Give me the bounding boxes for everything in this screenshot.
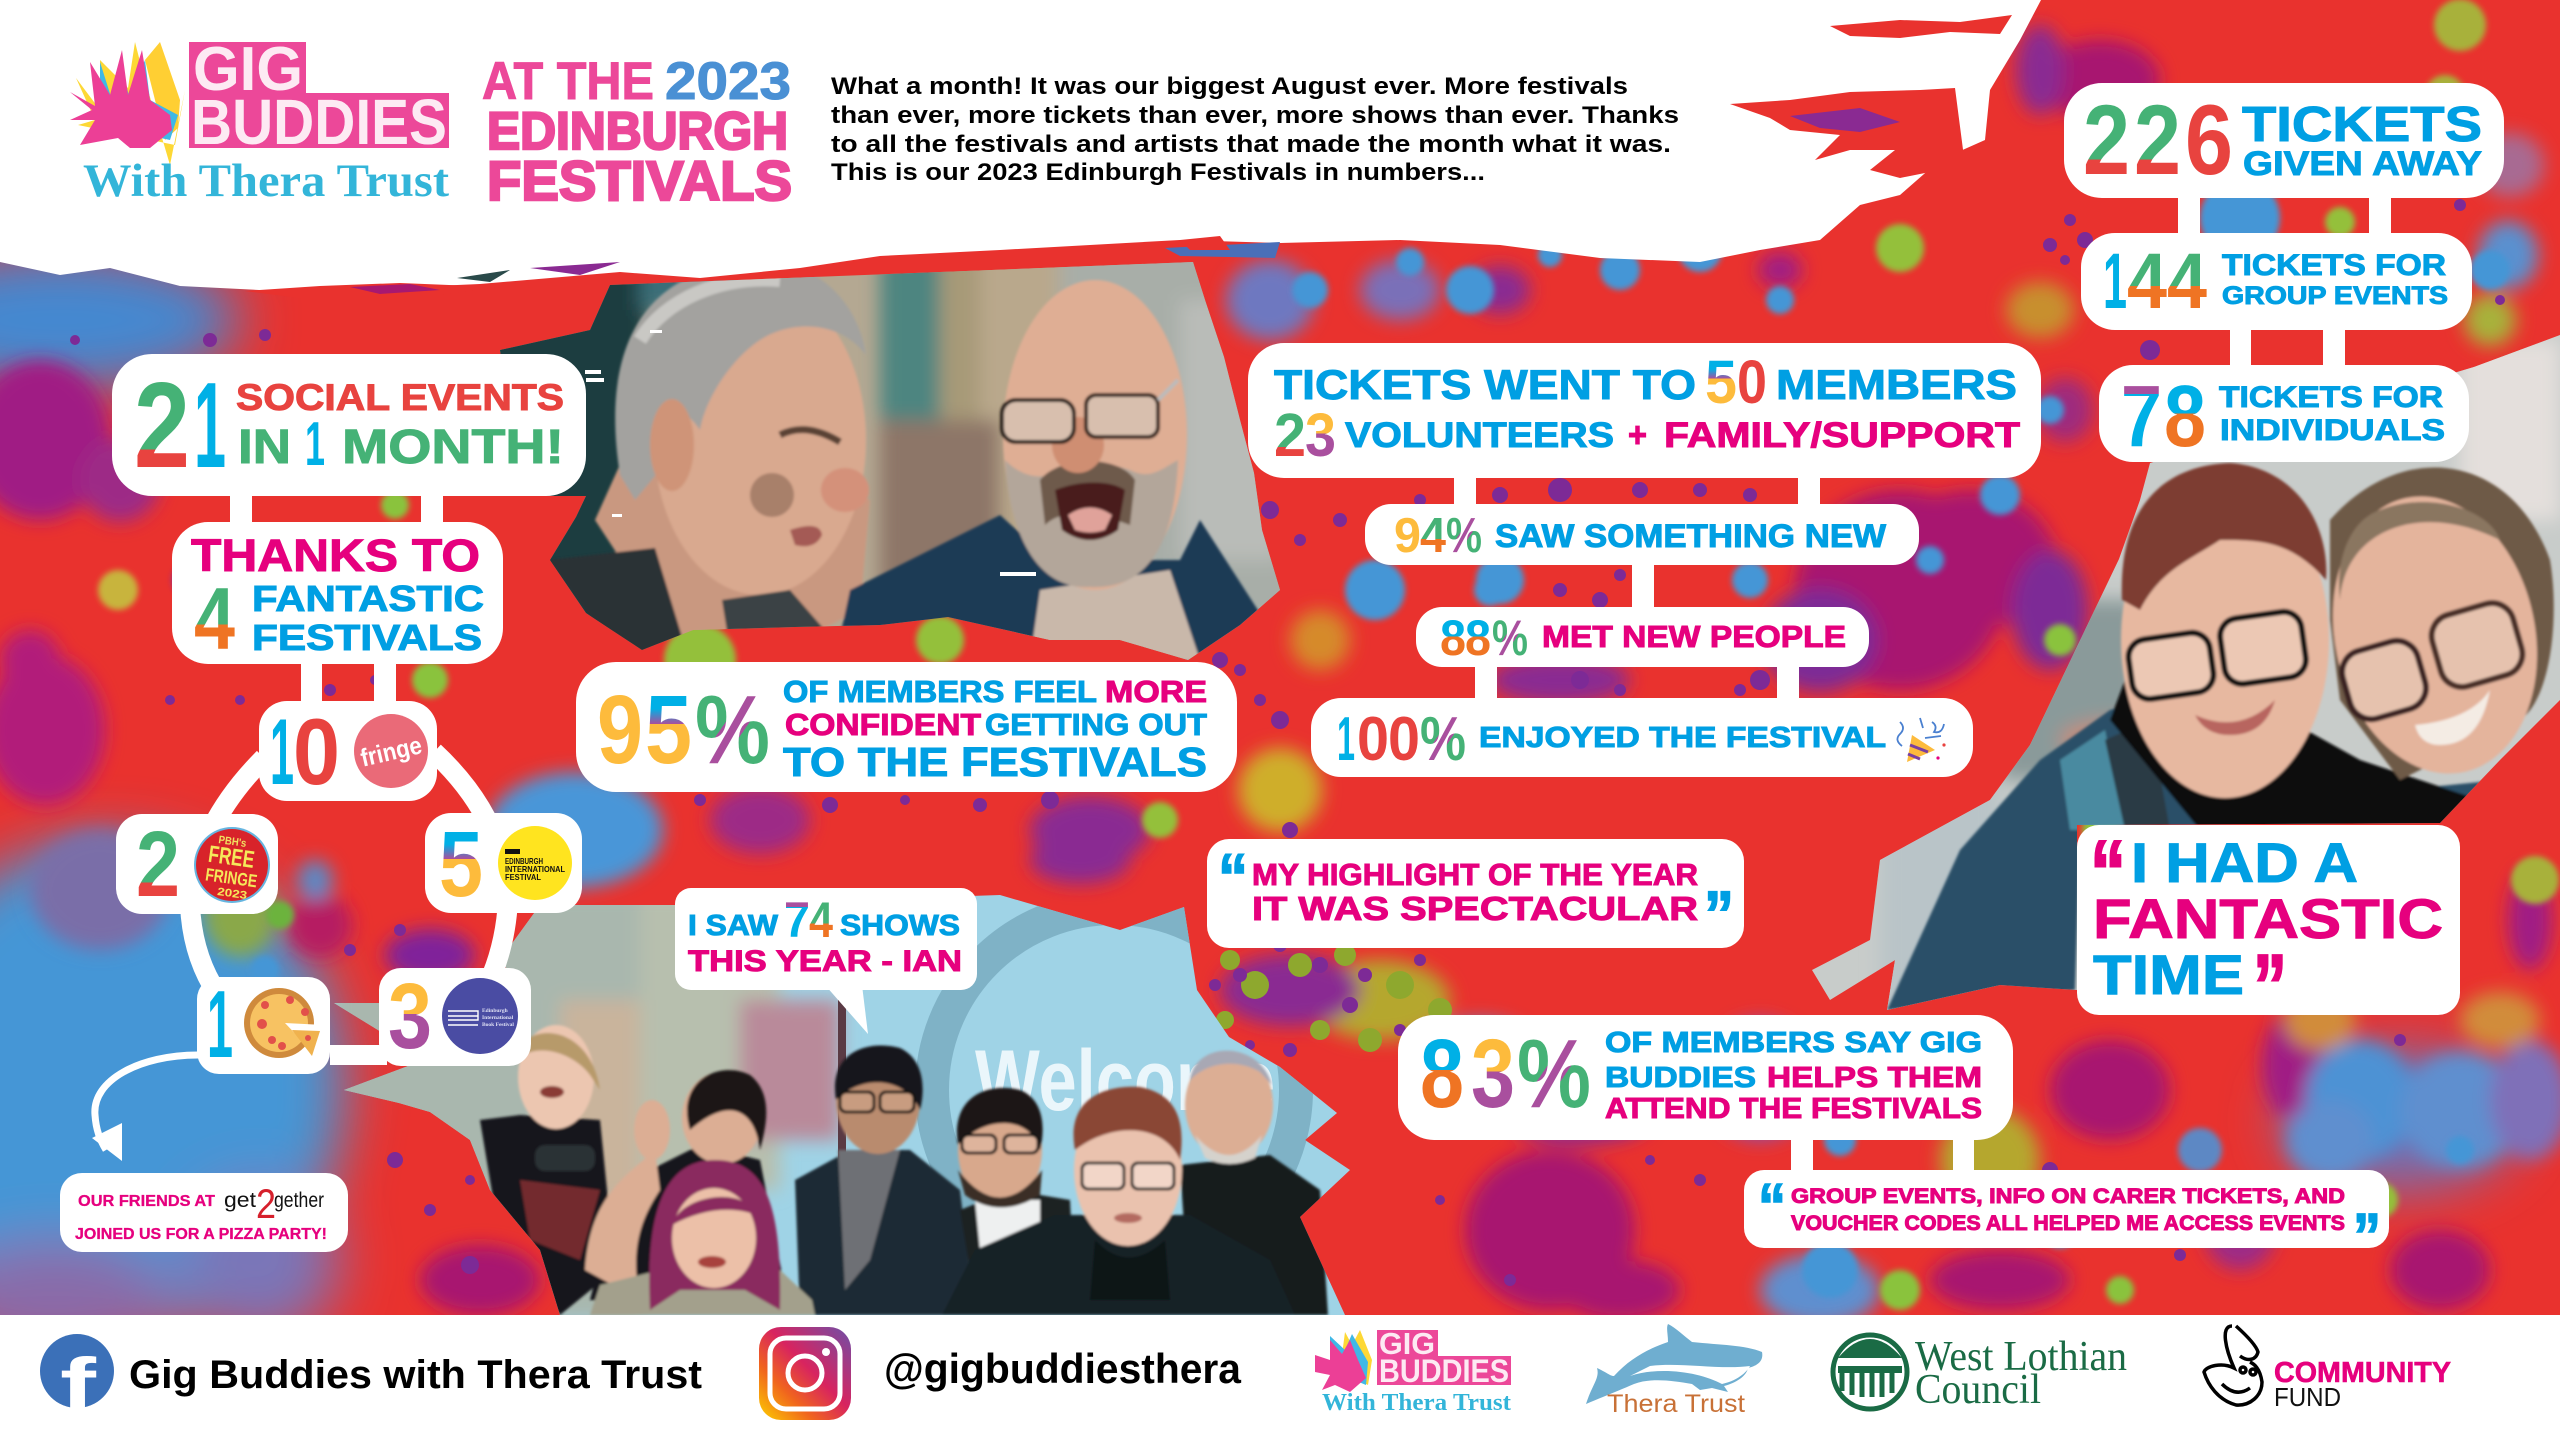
footer logo: Community Fund xyxy=(2204,1326,2451,1412)
card: 83% say Gig Buddies helps them attend: HELPS THEM xyxy=(1767,1062,1982,1094)
card: thanks to 4 fantastic festivals: FANTASTIC xyxy=(252,578,484,619)
card: 83% say Gig Buddies helps them attend: BUDDIES xyxy=(1605,1062,1756,1094)
logo: Gig Buddies with Thera Trust: GIG xyxy=(193,35,303,104)
card: 10 fringe: 1 xyxy=(270,699,294,804)
person 3 front woman xyxy=(590,1270,815,1315)
card: 226 tickets given away: 2 xyxy=(2083,84,2130,195)
card: 100% enjoyed the festival: 0 xyxy=(1388,705,1420,774)
card: 226 tickets given away: TICKETS xyxy=(2242,98,2482,152)
card: 94% saw something new: SAW SOMETHING NEW xyxy=(1495,518,1887,554)
card: 100% enjoyed the festival: 1 xyxy=(1337,705,1355,774)
footer logo: Gig Buddies small: GIG xyxy=(1379,1326,1435,1361)
person 6 front boy xyxy=(942,1215,1295,1315)
card: 226 tickets given away: 6 xyxy=(2185,84,2233,195)
card: 95% of members feel more confident: MORE xyxy=(1105,674,1207,709)
card: 21 social events in 1 month: 2 xyxy=(134,357,190,493)
quote card: I had a fantastic time: FANTASTIC xyxy=(2093,887,2443,950)
photo: group of seven members: Welcome xyxy=(975,1033,1275,1129)
card: get2gether pizza party: JOINED US FOR A PIZZA PARTY! xyxy=(75,1226,327,1243)
photo: two men laughing xyxy=(500,262,1280,660)
icon: instagram xyxy=(759,1327,851,1420)
quote card: group events, carer tickets, voucher codes: ” xyxy=(2353,1200,2381,1272)
quote card: group events, carer tickets, voucher codes: “ xyxy=(1758,1170,1786,1242)
footer logo: West Lothian Council xyxy=(1833,1334,2127,1413)
quote card: I had a fantastic time: ” xyxy=(2253,937,2287,1037)
card: 1 pizza party xyxy=(197,971,330,1078)
logo: Gig Buddies with Thera Trust: BUDDIES xyxy=(191,86,447,158)
card: tickets went to 50 members, 23 volunteers: 5 xyxy=(1705,348,1737,416)
card: 83% say Gig Buddies helps them attend: 3 xyxy=(1471,1019,1515,1128)
card: 94% saw something new: % xyxy=(1446,509,1482,563)
card: 10 fringe: 0 xyxy=(293,699,340,804)
card: 88% met new people: MET NEW PEOPLE xyxy=(1542,619,1846,654)
card: 83% say Gig Buddies helps them attend: 8 xyxy=(1420,1019,1464,1128)
card: 95% of members feel more confident: GETTING OUT xyxy=(985,707,1207,742)
card: 21 social events in 1 month: 1 xyxy=(194,357,226,493)
photo: couple smiling xyxy=(1800,320,2560,1040)
card: tickets went to 50 members, 23 volunteers: VOLUNTEERS xyxy=(1345,416,1614,455)
footer logo: Gig Buddies small xyxy=(1315,1326,1511,1416)
card: tickets went to 50 members, 23 volunteers xyxy=(1248,343,2041,478)
card: 21 social events in 1 month: MONTH! xyxy=(342,421,564,474)
heading: At the 2023 Edinburgh Festivals xyxy=(482,52,792,212)
speech bubble: I saw 74 shows: I SAW xyxy=(688,910,779,942)
footer: instagram xyxy=(759,1327,1242,1420)
card: tickets went to 50 members, 23 volunteers: 3 xyxy=(1305,401,1336,469)
footer: facebook: Gig Buddies with Thera Trust xyxy=(129,1353,702,1397)
icon: viaduct emblem xyxy=(1833,1335,1907,1409)
icon: pizza xyxy=(244,988,324,1060)
card: 100% enjoyed the festival: ENJOYED THE FESTIVAL xyxy=(1479,722,1886,754)
icon: crossed fingers hand xyxy=(2204,1326,2262,1405)
logo: Gig Buddies with Thera Trust: With Thera Trust xyxy=(83,155,449,207)
logo: Gig Buddies with Thera Trust xyxy=(70,35,449,207)
card: 100% enjoyed the festival: 0 xyxy=(1357,705,1389,774)
speech bubble: I saw 74 shows: SHOWS xyxy=(840,910,960,942)
card: 83% say Gig Buddies helps them attend xyxy=(1398,1015,2013,1140)
card: 21 social events in 1 month: 1 xyxy=(305,410,325,479)
intro paragraph xyxy=(831,73,1679,186)
card: get2gether pizza party: 2 xyxy=(256,1180,276,1227)
intro paragraph: This is our 2023 Edinburgh Festivals in numbers... xyxy=(831,159,1485,186)
connectors: festivals tree xyxy=(190,490,508,1065)
icon: PBH free fringe logo: FREE xyxy=(207,841,256,874)
icon: EIF logo: INTERNATIONAL xyxy=(505,864,565,874)
card: tickets went to 50 members, 23 volunteers: + xyxy=(1628,416,1647,455)
card: tickets went to 50 members, 23 volunteers: MEMBERS xyxy=(1776,361,2017,408)
card: 21 social events in 1 month: SOCIAL EVENTS xyxy=(236,377,564,418)
speech bubble: I saw 74 shows: 4 xyxy=(809,892,833,948)
speech bubble: I saw 74 shows xyxy=(675,888,977,1034)
heading: At the 2023 Edinburgh Festivals: FESTIVALS xyxy=(487,149,792,212)
icon: PBH free fringe logo: FRINGE xyxy=(204,864,258,891)
heading: At the 2023 Edinburgh Festivals: 2023 xyxy=(665,52,791,111)
card: 21 social events in 1 month xyxy=(112,354,586,496)
card: 78 tickets for individuals: 7 xyxy=(2121,368,2162,465)
card: 78 tickets for individuals: TICKETS FOR xyxy=(2219,381,2443,414)
quote card: my highlight of the year xyxy=(1207,839,1744,951)
card: get2gether pizza party: OUR FRIENDS AT xyxy=(78,1193,216,1210)
card: 95% of members feel more confident: OF MEMBERS FEEL xyxy=(783,674,1097,709)
footer logo: Community Fund: COMMUNITY xyxy=(2274,1357,2451,1389)
card: 95% of members feel more confident xyxy=(576,662,1237,792)
card: 2 PBH free fringe: 2 xyxy=(136,812,180,916)
icon: book festival logo xyxy=(442,978,518,1054)
icon: EIF logo: FESTIVAL xyxy=(505,872,541,882)
card: 88% met new people: % xyxy=(1492,610,1528,666)
footer logo: Thera Trust dolphin: Thera Trust xyxy=(1607,1390,1745,1418)
footer white band xyxy=(0,1315,2560,1440)
person 5 xyxy=(960,1193,1073,1263)
card: 100% enjoyed the festival xyxy=(1311,698,1973,777)
person 7 older man xyxy=(1180,1155,1328,1315)
icon: book festival logo: International xyxy=(482,1015,514,1021)
card: get2gether pizza party: get xyxy=(224,1189,256,1212)
left man xyxy=(594,466,870,635)
card: 88% met new people xyxy=(1416,607,1869,667)
dense splatter band xyxy=(1216,944,1452,1052)
icon: facebook xyxy=(40,1334,114,1426)
quote card: my highlight of the year: IT WAS SPECTACULAR xyxy=(1252,890,1698,927)
footer: facebook xyxy=(40,1334,702,1426)
card: thanks to 4 fantastic festivals: 4 xyxy=(194,569,235,668)
card: 78 tickets for individuals: 8 xyxy=(2164,368,2206,465)
header torn white panel xyxy=(0,0,2041,292)
card: 226 tickets given away xyxy=(2064,83,2504,198)
card: 95% of members feel more confident: 5 xyxy=(645,675,692,784)
right man xyxy=(835,515,1290,660)
quote card: group events, carer tickets, voucher codes xyxy=(1744,1170,2389,1272)
card: 2 PBH free fringe xyxy=(116,812,278,916)
heading: At the 2023 Edinburgh Festivals: EDINBURGH xyxy=(487,102,788,161)
heading: At the 2023 Edinburgh Festivals: AT THE xyxy=(482,52,654,111)
card: 100% enjoyed the festival: % xyxy=(1420,705,1466,774)
icon: PBH free fringe logo: 2023 xyxy=(216,886,248,902)
quote card: I had a fantastic time: I HAD A xyxy=(2131,831,2358,894)
intro paragraph: What a month! It was our biggest August ever. More festivals xyxy=(831,73,1628,100)
footer logo: West Lothian Council: Council xyxy=(1915,1367,2041,1413)
card: 94% saw something new: 9 xyxy=(1394,509,1421,563)
card: get2gether pizza party xyxy=(60,1173,348,1252)
card: 144 tickets for group events: 1 xyxy=(2103,236,2127,325)
card: 10 fringe xyxy=(259,699,437,804)
card: 83% say Gig Buddies helps them attend: OF MEMBERS SAY GIG xyxy=(1605,1027,1982,1059)
card: 144 tickets for group events: 4 xyxy=(2127,236,2167,325)
icon: book festival logo: Edinburgh xyxy=(482,1008,508,1014)
person 1 xyxy=(480,1115,615,1315)
card: 3 Edinburgh International Book Festival xyxy=(379,964,531,1068)
icon: EIF logo: EDINBURGH xyxy=(505,856,543,866)
quote card: my highlight of the year: ” xyxy=(1704,877,1734,951)
card: 226 tickets given away: 2 xyxy=(2134,84,2181,195)
intro paragraph: than ever, more tickets than ever, more shows than ever. Thanks xyxy=(831,102,1679,129)
card: 94% saw something new: 4 xyxy=(1420,509,1446,563)
card: 144 tickets for group events: GROUP EVENTS xyxy=(2222,282,2448,310)
intro paragraph: to all the festivals and artists that made the month what it was. xyxy=(831,131,1671,158)
footer logo: Gig Buddies small: With Thera Trust xyxy=(1322,1390,1511,1416)
quote card: group events, carer tickets, voucher codes: VOUCHER CODES ALL HELPED ME ACCESS EVENTS xyxy=(1791,1212,2345,1235)
person 2 xyxy=(590,1145,790,1315)
photo: group of seven members xyxy=(330,890,1390,1320)
card: 95% of members feel more confident: % xyxy=(695,675,770,784)
card: 83% say Gig Buddies helps them attend: ATTEND THE FESTIVALS xyxy=(1605,1093,1982,1125)
footer logo: West Lothian Council: West Lothian xyxy=(1915,1334,2127,1380)
person 4 glasses jacket xyxy=(795,1150,975,1315)
footer logo: Thera Trust dolphin xyxy=(1586,1324,1762,1418)
footer logo: Gig Buddies small: BUDDIES xyxy=(1379,1353,1509,1389)
card: 144 tickets for group events: TICKETS FOR xyxy=(2222,249,2446,282)
card: 88% met new people: 8 xyxy=(1465,610,1491,666)
quote card: my highlight of the year: “ xyxy=(1218,840,1248,914)
card: thanks to 4 fantastic festivals: FESTIVALS xyxy=(252,617,482,658)
icon: EIF logo xyxy=(498,826,572,900)
icon: spiky hair splash xyxy=(70,42,185,165)
card: tickets went to 50 members, 23 volunteers: FAMILY/SUPPORT xyxy=(1664,416,2020,455)
card: 83% say Gig Buddies helps them attend: % xyxy=(1517,1019,1591,1128)
icon: book festival logo: Book Festival xyxy=(482,1022,514,1028)
card: 1 pizza party: 1 xyxy=(207,971,233,1078)
card: 144 tickets for group events xyxy=(2081,233,2472,330)
quote card: group events, carer tickets, voucher codes: GROUP EVENTS, INFO ON CARER TICKETS, AND xyxy=(1791,1185,2345,1208)
card: 78 tickets for individuals: INDIVIDUALS xyxy=(2220,414,2445,447)
icon: facebook: f xyxy=(60,1343,97,1426)
speech bubble: I saw 74 shows: THIS YEAR - IAN xyxy=(688,945,962,978)
card: 95% of members feel more confident: CONFIDENT xyxy=(785,707,981,742)
quote card: I had a fantastic time: TIME xyxy=(2093,943,2244,1006)
footer logo: Community Fund: FUND xyxy=(2274,1382,2341,1412)
quote card: I had a fantastic time xyxy=(2077,823,2460,1037)
speech bubble: I saw 74 shows: 7 xyxy=(784,892,810,948)
card: 95% of members feel more confident: TO THE FESTIVALS xyxy=(783,739,1207,785)
card: tickets went to 50 members, 23 volunteers: 2 xyxy=(1274,401,1306,469)
card: 95% of members feel more confident: 9 xyxy=(597,675,643,784)
card: 5 Edinburgh International Festival xyxy=(425,812,582,916)
card: 78 tickets for individuals xyxy=(2099,365,2469,465)
card: 94% saw something new xyxy=(1365,504,1919,565)
connectors: member stats xyxy=(1454,194,2391,1175)
icon: PBH free fringe logo xyxy=(194,827,270,903)
icon: PBH free fringe logo: PBH's xyxy=(218,834,247,850)
card: 3 Edinburgh International Book Festival: 3 xyxy=(388,964,432,1068)
arrow: pizza to get2gether xyxy=(92,1055,198,1161)
card: tickets went to 50 members, 23 volunteers: 0 xyxy=(1737,348,1767,416)
card: thanks to 4 fantastic festivals xyxy=(172,522,503,668)
icon: fringe logo: fringe xyxy=(358,731,425,773)
card: 144 tickets for group events: 4 xyxy=(2167,236,2207,325)
card: thanks to 4 fantastic festivals: THANKS TO xyxy=(191,530,480,581)
card: 21 social events in 1 month: IN xyxy=(238,421,291,474)
quote card: I had a fantastic time: “ xyxy=(2090,823,2126,923)
card: 88% met new people: 8 xyxy=(1440,610,1466,666)
footer: instagram: @gigbuddiesthera xyxy=(884,1345,1242,1392)
card: 226 tickets given away: GIVEN AWAY xyxy=(2243,145,2482,183)
card: get2gether pizza party: gether xyxy=(274,1189,324,1212)
card: 5 Edinburgh International Festival: 5 xyxy=(439,812,483,916)
icon: party popper xyxy=(1897,718,1946,762)
torn paint streaks at header edge xyxy=(245,15,2012,298)
icon: fringe logo xyxy=(354,714,428,788)
quote card: my highlight of the year: MY HIGHLIGHT OF THE YEAR xyxy=(1252,857,1698,892)
card: tickets went to 50 members, 23 volunteers: TICKETS WENT TO xyxy=(1274,361,1696,408)
